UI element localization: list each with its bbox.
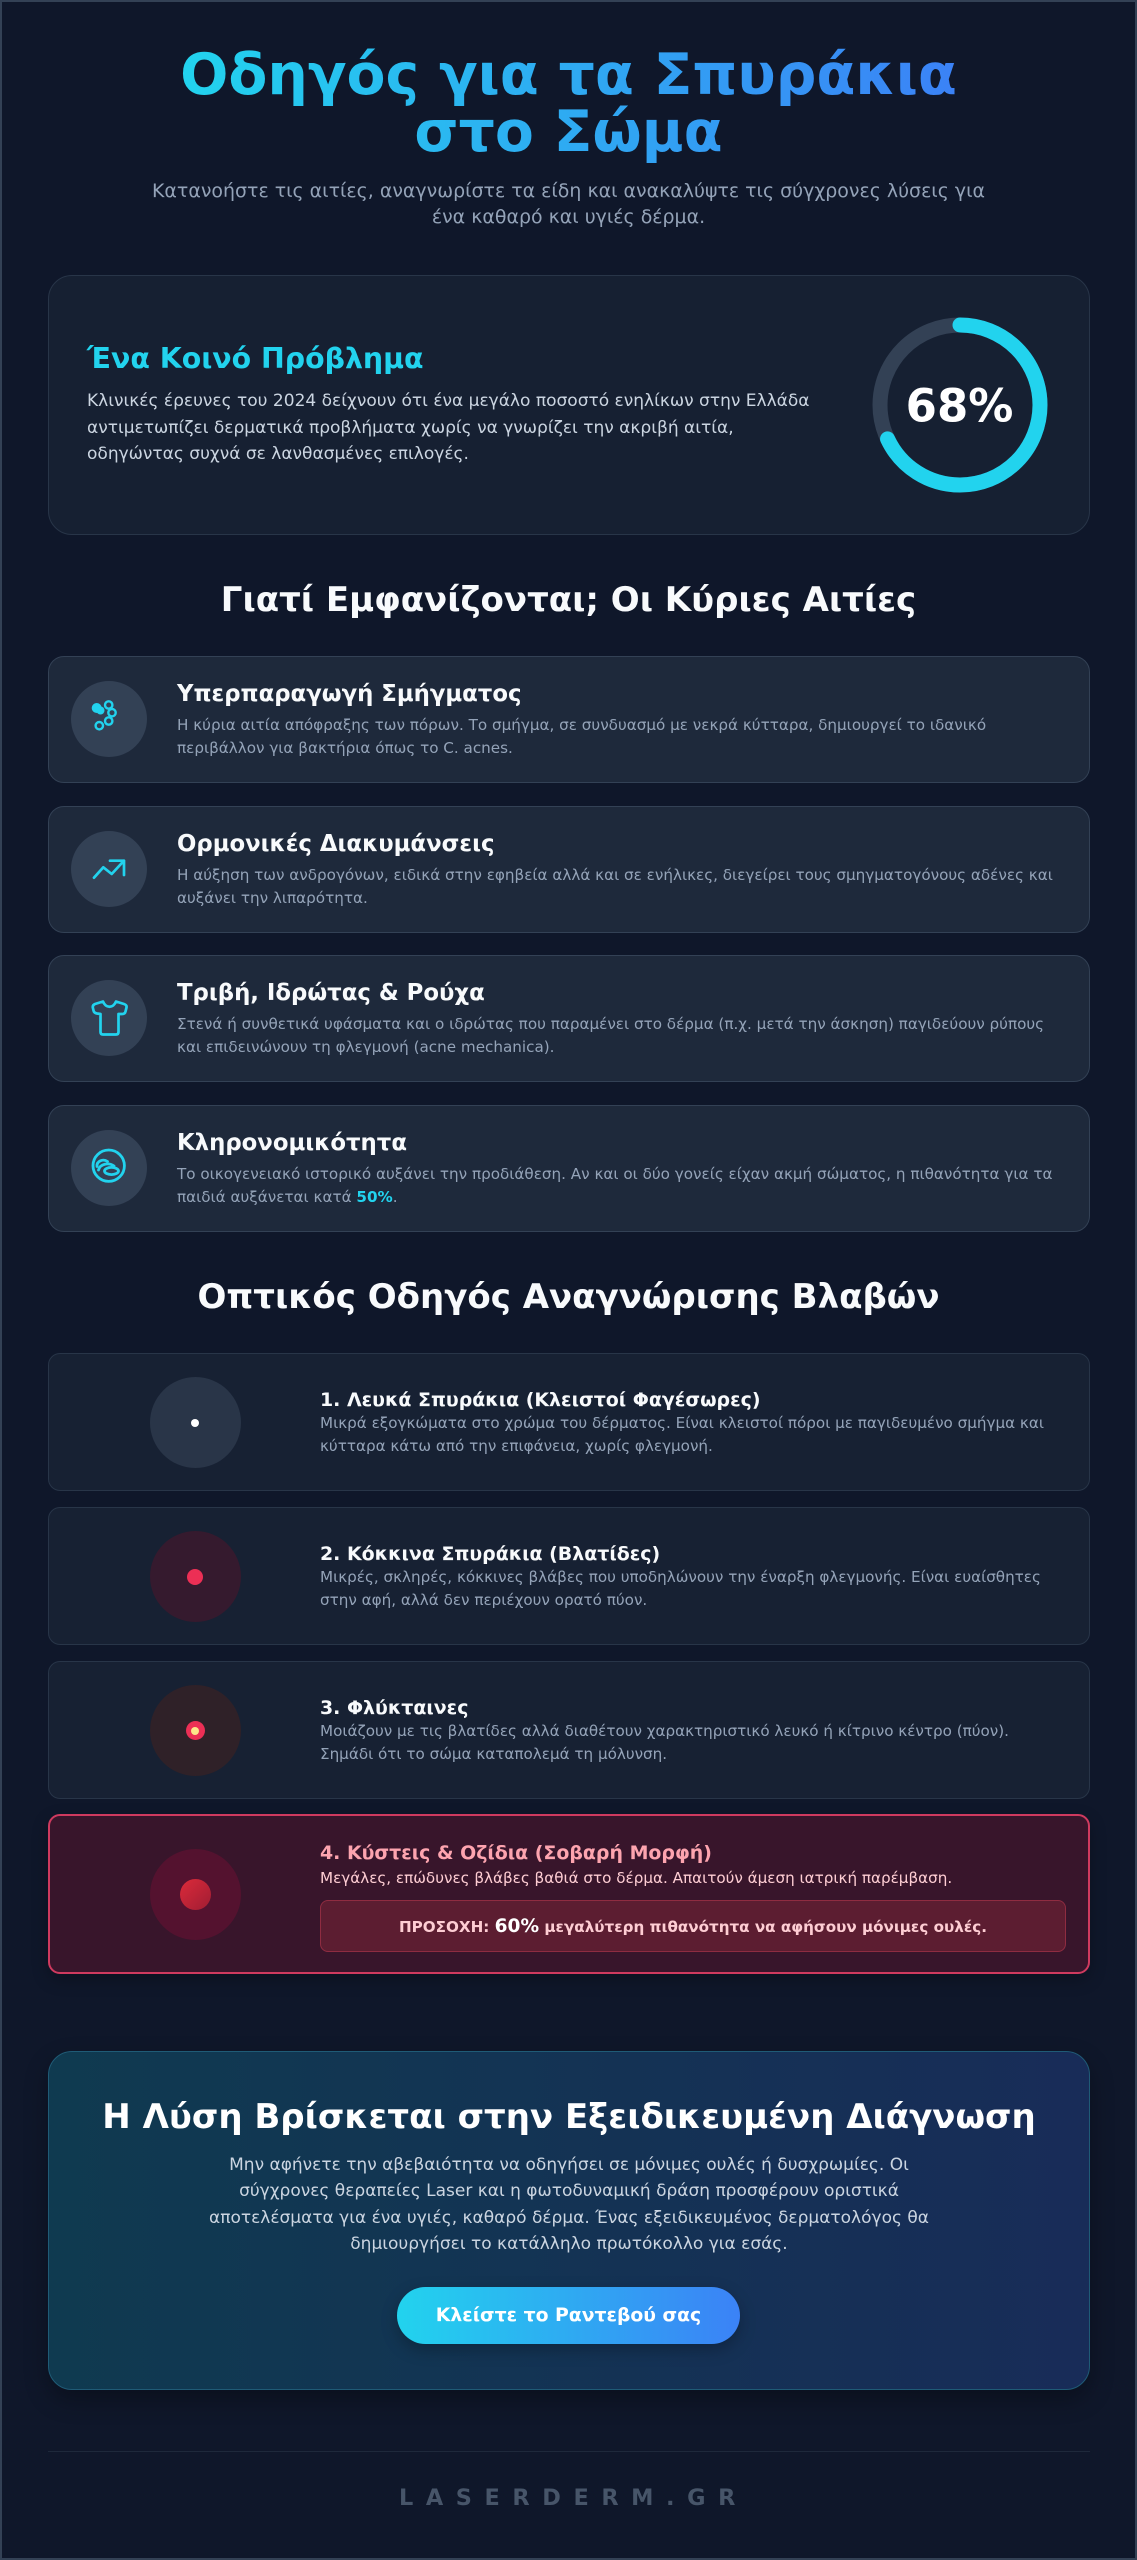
panel: cause hormones: [48, 806, 1090, 933]
panel: cause sebum: [48, 656, 1090, 783]
panel: papules: [48, 1507, 1090, 1645]
cause text: αυξάνει την λιπαρότητα.: [177, 889, 368, 907]
text: problem description: Κλινικές έρευνες του 2024 δείχνουν ότι ένα μεγάλο ποσοστό ενηλίκων στην Ελλάδα: [87, 391, 810, 411]
panel: call to action: [48, 2051, 1090, 2390]
footer: brand: LASERDERM.GR: [399, 2485, 748, 2511]
chart: 68 percent ring: [872, 318, 1048, 492]
text: problem description: οδηγώντας συχνά σε λανθασμένες επιλογές.: [87, 444, 469, 464]
text: solution description: Μην αφήνετε την αβεβαιότητα να οδηγήσει σε μόνιμες ουλές ή δυσχρωμίες. Οι: [229, 2155, 909, 2175]
cause text: [177, 866, 1053, 907]
icon: deep cyst lesion: [150, 1849, 241, 1940]
title: [180, 42, 957, 165]
lesion title: 1. Λευκά Σπυράκια (Κλειστοί Φαγέσωρες): [320, 1389, 761, 1411]
icon: sebum droplets: [71, 681, 147, 757]
heading: common problem: Ένα Κοινό Πρόβλημα: [87, 342, 424, 375]
lesion text: Σημάδι ότι το σώμα καταπολεμά τη μόλυνση.: [320, 1745, 667, 1763]
cause text: Η κύρια αιτία απόφραξης των πόρων. Το σμήγμα, σε συνδυασμό με νεκρά κύτταρα, δημιουργεί το ιδανικό: [177, 716, 986, 734]
lesion text: [320, 1568, 1041, 1609]
chart: 68 percent ring: 68%: [906, 380, 1013, 432]
panel: pustules: [48, 1661, 1090, 1799]
subtitle: Κατανοήστε τις αιτίες, αναγνωρίστε τα είδη και ανακαλύψτε τις σύγχρονες λύσεις για: [152, 180, 985, 202]
subtitle: [152, 180, 985, 228]
text: solution description: αποτελέσματα για ένα υγιές, καθαρό δέρμα. Ένας εξειδικευμένος δερματολόγος θα: [209, 2208, 929, 2228]
text: solution description: [209, 2155, 929, 2254]
lesion title: 3. Φλύκταινες: [320, 1697, 468, 1719]
title: Οδηγός για τα Σπυράκια: [180, 42, 957, 108]
cause text: [176, 1165, 1052, 1206]
warning box: [320, 1900, 1066, 1952]
lesion text: κύτταρα κάτω από την επιφάνεια, χωρίς φλεγμονή.: [320, 1437, 713, 1455]
panel: cysts warning: [48, 1814, 1090, 1974]
heading: solution: Η Λύση Βρίσκεται στην Εξειδικευμένη Διάγνωση: [102, 2097, 1036, 2137]
cause text: παιδιά αυξάνεται κατά 50%.: [177, 1188, 398, 1206]
cause title: Τριβή, Ιδρώτας & Ρούχα: [177, 980, 485, 1006]
heading: lesion guide: Οπτικός Οδηγός Αναγνώρισης Βλαβών: [197, 1277, 940, 1317]
icon: trend arrow: [71, 831, 147, 907]
cause title: Ορμονικές Διακυμάνσεις: [177, 831, 494, 857]
cause text: και επιδεινώνουν τη φλεγμονή (acne mechanica).: [177, 1038, 554, 1056]
text: problem description: [87, 391, 810, 464]
panel: cause heredity: [48, 1105, 1090, 1232]
cause title: Κληρονομικότητα: [177, 1130, 407, 1156]
icon: t-shirt: [71, 980, 147, 1056]
cause title: Υπερπαραγωγή Σμήγματος: [177, 681, 522, 707]
footer divider line: [48, 2451, 1090, 2452]
lesion text: Μοιάζουν με τις βλατίδες αλλά διαθέτουν χαρακτηριστικό λευκό ή κίτρινο κέντρο (πύον).: [320, 1722, 1009, 1740]
panel: common problem: [48, 275, 1090, 535]
warning box: ΠΡΟΣΟΧΗ: 60% μεγαλύτερη πιθανότητα να αφήσουν μόνιμες ουλές.: [399, 1916, 987, 1937]
heading: causes: Γιατί Εμφανίζονται; Οι Κύριες Αιτίες: [221, 580, 916, 620]
cause text: περιβάλλον για βακτήρια όπως το C. acnes.: [177, 739, 513, 757]
cause text: Το οικογενειακό ιστορικό αυξάνει την προδιάθεση. Αν και οι δύο γονείς είχαν ακμή σώματος, η πιθανότητα για τα: [177, 1165, 1052, 1183]
title: στο Σώμα: [414, 99, 723, 165]
lesion title: 4. Κύστεις & Οζίδια (Σοβαρή Μορφή): [320, 1842, 712, 1864]
lesion text: Μικρά εξογκώματα στο χρώμα του δέρματος. Είναι κλειστοί πόροι με παγιδευμένο σμήγμα και: [320, 1414, 1044, 1432]
icon: red dot with yellow centre: [150, 1685, 240, 1776]
text: solution description: δημιουργήσει το κατάλληλο πρωτόκολλο για εσάς.: [350, 2234, 788, 2254]
text: solution description: σύγχρονες θεραπείες Laser και η φωτοδυναμική δράση προσφέρουν οριστικά: [239, 2181, 899, 2201]
cause text: [177, 1015, 1044, 1056]
panel: whiteheads: [48, 1353, 1090, 1491]
lesion title: 2. Κόκκινα Σπυράκια (Βλατίδες): [320, 1543, 660, 1565]
button: book appointment: [397, 2287, 740, 2344]
lesion text: στην αφή, αλλά δεν περιέχουν ορατό πύον.: [320, 1591, 647, 1609]
icon: red dot lesion: [150, 1531, 240, 1622]
lesion text: Μεγάλες, επώδυνες βλάβες βαθιά στο δέρμα. Απαιτούν άμεση ιατρική παρέμβαση.: [320, 1868, 952, 1886]
cause text: [177, 716, 986, 757]
cause text: Η αύξηση των ανδρογόνων, ειδικά στην εφηβεία αλλά και σε ενήλικες, διεγείρει τους σμηγματογόνους αδένες και: [177, 866, 1053, 884]
panel: cause friction: [48, 955, 1090, 1082]
lesion text: [320, 1722, 1009, 1763]
icon: white dot lesion: [150, 1377, 240, 1468]
lesion text: [320, 1414, 1044, 1455]
lesion text: Μικρές, σκληρές, κόκκινες βλάβες που υποδηλώνουν την έναρξη φλεγμονής. Είναι ευαίσθητες: [320, 1568, 1041, 1586]
subtitle: ένα καθαρό και υγιές δέρμα.: [432, 206, 705, 228]
cause text: Στενά ή συνθετικά υφάσματα και ο ιδρώτας που παραμένει στο δέρμα (π.χ. μετά την άσκηση) παγιδεύουν ρύπους: [177, 1015, 1044, 1033]
text: problem description: αντιμετωπίζει δερματικά προβλήματα χωρίς να γνωρίζει την ακριβή αιτία,: [87, 418, 734, 438]
icon: family swirl: [71, 1130, 147, 1206]
button: book appointment: Κλείστε το Ραντεβού σας: [436, 2305, 701, 2326]
